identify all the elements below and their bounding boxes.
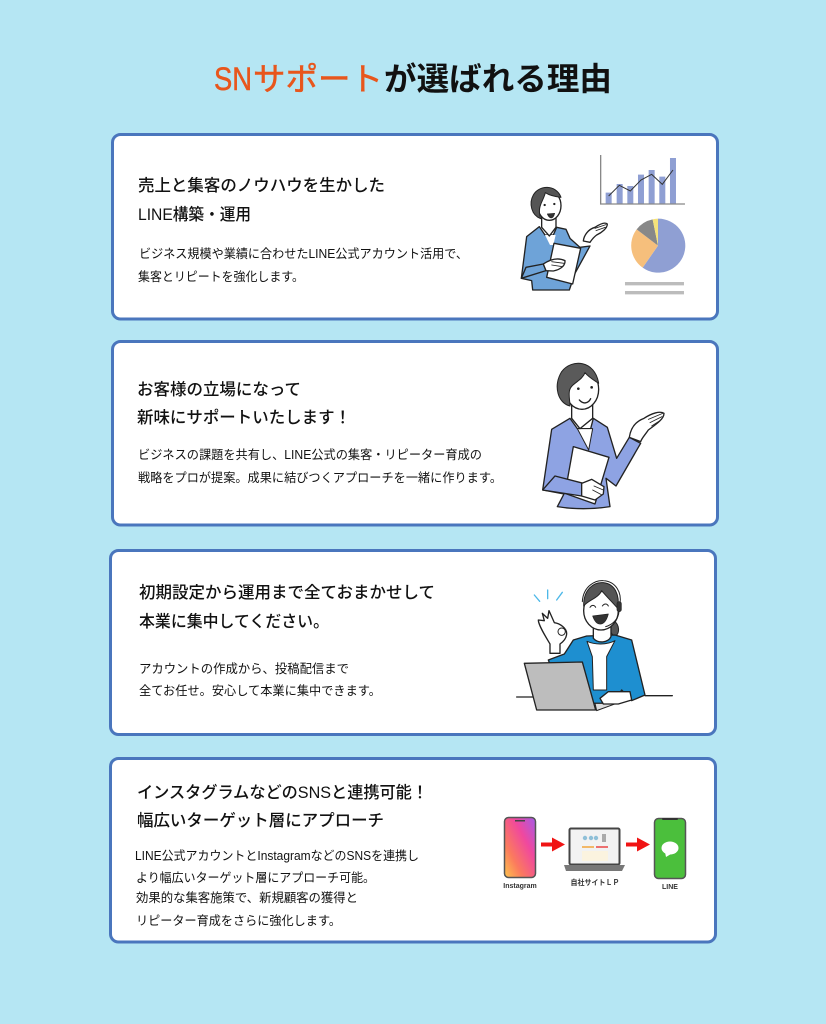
body text: panel 1: 集客とリピートを強化します。	[138, 269, 304, 284]
title: SN	[214, 61, 252, 97]
flow diagram: Instagram to site to LINE	[503, 818, 686, 891]
body text: panel 4: リピーター育成をさらに強化します。	[136, 913, 341, 928]
body text: panel 3	[139, 661, 381, 698]
body text: panel 4: より幅広いターゲット層にアプローチ可能。	[136, 870, 375, 885]
title: サポート	[253, 61, 383, 97]
icon: laptop with landing page	[564, 828, 625, 887]
icon: Instagram phone	[503, 818, 537, 890]
body text: panel 1: ビジネス規模や業績に合わせたLINE公式アカウント活用で、	[139, 246, 468, 261]
body text: panel 2: ビジネスの課題を共有し、LINE公式の集客・リピーター育成の	[138, 447, 482, 462]
illustration: operator at laptop	[517, 581, 672, 711]
panel: SNS integration	[110, 758, 716, 942]
body text: panel 4: LINE公式アカウントとInstagramなどのSNSを連携し	[135, 848, 419, 863]
heading: panel 3: 初期設定から運用まで全ておまかせして	[139, 583, 435, 602]
heading: panel 2	[137, 380, 351, 427]
heading: panel 2: お客様の立場になって	[137, 380, 301, 399]
icon: LINE phone	[654, 818, 686, 891]
bar chart	[601, 155, 685, 204]
heading: panel 4: インスタグラムなどのSNSと連携可能！	[137, 783, 428, 802]
heading: panel 1: 売上と集客のノウハウを生かした	[138, 176, 385, 195]
body text: panel 3: 全てお任せ。安心して本業に集中できます。	[139, 683, 381, 698]
pie chart	[625, 219, 685, 294]
body text: panel 2: 戦略をプロが提案。成果に結びつくアプローチを一緒に作ります。	[138, 470, 502, 485]
heading: panel 4: 幅広いターゲット層にアプローチ	[137, 811, 384, 830]
body text: panel 1	[138, 246, 468, 284]
arrow	[626, 838, 650, 852]
panel: customer's perspective	[112, 342, 718, 525]
body text: panel 3: アカウントの作成から、投稿配信まで	[139, 661, 349, 676]
title: が選ばれる理由	[384, 61, 612, 97]
heading: panel 2: 新味にサポートいたします！	[137, 408, 351, 427]
panel: LINE construction and operation	[112, 134, 718, 319]
title	[214, 61, 612, 97]
body text: panel 4: 効果的な集客施策で、新規顧客の獲得と	[136, 890, 358, 905]
heading: panel 3	[139, 583, 435, 631]
body text: panel 4	[135, 848, 419, 928]
heading: panel 4	[137, 783, 428, 830]
icon: laptop with landing page: 自社サイトＬＰ	[570, 877, 620, 887]
icon: Instagram phone: Instagram	[503, 883, 537, 890]
panel: full-service operation	[110, 550, 716, 734]
body text: panel 2	[138, 447, 502, 485]
arrow	[541, 838, 565, 852]
person	[521, 187, 607, 290]
heading: panel 3: 本業に集中してください。	[139, 612, 329, 631]
icon: LINE phone: LINE	[662, 884, 678, 891]
heading: panel 1: LINE構築・運用	[138, 205, 251, 224]
illustration: woman holding a document	[543, 363, 664, 509]
illustration: presenter with charts	[521, 155, 685, 294]
heading: panel 1	[138, 176, 385, 224]
